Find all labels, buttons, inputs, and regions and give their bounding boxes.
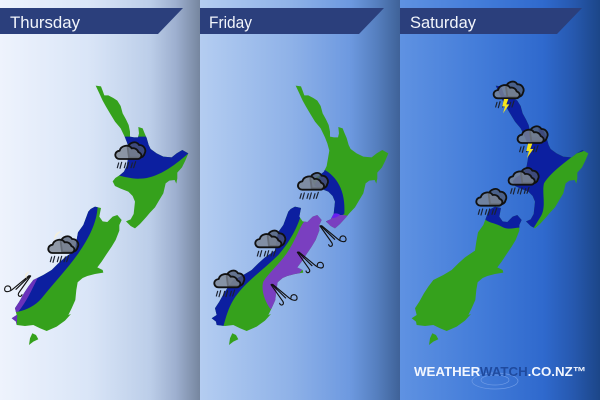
icon: rain cloud with moon, South Island: [48, 231, 78, 262]
icon: thunderstorm cloud, Northland: [494, 82, 524, 113]
logo: WeatherWatch.co.nz: [414, 364, 586, 389]
heading: Saturday: Saturday: [410, 13, 476, 32]
logo: WeatherWatch.co.nz: WEATHERWATCH.CO.NZ™: [414, 364, 586, 379]
panel: Friday: [200, 0, 400, 400]
banner: Thursday: [0, 8, 183, 34]
icon: wind with moon, South Island: [5, 271, 31, 296]
icon: rain cloud, upper South Island: [255, 231, 285, 257]
icon: wind, Otago: [271, 284, 297, 305]
icon: rain cloud, lower South Island: [214, 271, 244, 297]
panel: Thursday: [0, 0, 200, 400]
map: Thursday rain and wind zones: [10, 86, 200, 345]
panel: Saturday: [400, 0, 600, 400]
panel background: Thursday: [0, 0, 200, 400]
map: Saturday rain zones: [412, 80, 600, 345]
banner: Saturday: [400, 8, 582, 34]
heading: Friday: Friday: [209, 13, 252, 32]
banner: Friday: [200, 8, 384, 34]
panel background: Friday: [200, 0, 400, 400]
icon: wind, Cook Strait: [320, 226, 346, 246]
panel background: Saturday: [400, 0, 600, 400]
icon: rain cloud, central North Island: [298, 173, 328, 199]
icon: thunderstorm cloud, Waikato: [518, 126, 548, 158]
icon: wind, Canterbury: [297, 252, 323, 273]
icon: rain cloud, central North Island: [509, 168, 539, 194]
map: Friday rain and wind zones: [207, 86, 388, 345]
icon: rain cloud, Cook Strait: [476, 189, 506, 215]
heading: Thursday: Thursday: [10, 13, 80, 32]
icon: rain cloud, North Island: [115, 142, 145, 168]
